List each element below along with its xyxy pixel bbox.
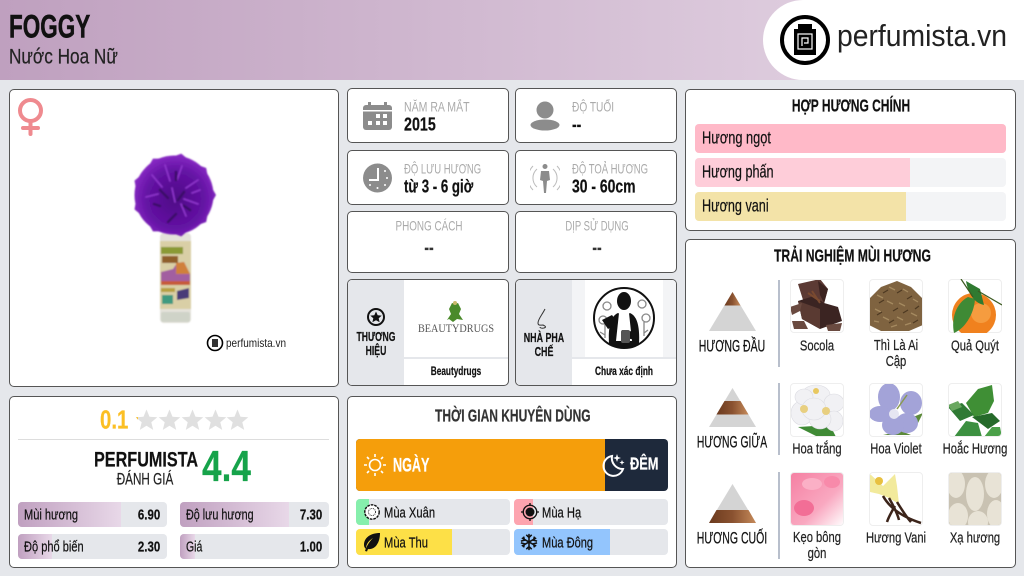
bar: Giá	[180, 534, 329, 559]
label: base notes: HƯƠNG CUỐI	[697, 529, 767, 548]
card: độ lưu hương: từ 3 - 6 giờ	[404, 176, 473, 197]
rating caption: ĐÁNH GIÁ	[117, 470, 173, 489]
icon: calendar	[363, 102, 392, 130]
panel: product image	[9, 89, 339, 387]
card: dịp sử dụng	[515, 211, 677, 273]
icon: female symbol	[18, 98, 286, 352]
heading: scent experience: TRẢI NGHIỆM MÙI HƯƠNG	[774, 247, 931, 266]
accord: Hương ngọt: Hương ngọt	[702, 129, 771, 148]
note: Socola	[790, 279, 844, 354]
accord: Hương vani: Hương vani	[702, 197, 769, 216]
note: Hoa Violet	[869, 383, 923, 457]
note: Socola: Socola	[800, 336, 834, 354]
icon: scent radius	[530, 164, 560, 193]
note: Hoa Violet: Hoa Violet	[870, 439, 922, 457]
bar: Mùi hương: Mùi hương	[24, 505, 78, 523]
brand logo: BEAUTYDRUGS	[418, 321, 494, 335]
bar: Độ phổ biến: Độ phổ biến	[24, 537, 84, 555]
card: phong cách: PHONG CÁCH	[396, 217, 462, 234]
card: thương hiệu: THƯƠNG HIỆU	[356, 329, 396, 358]
card: dịp sử dụng: DỊP SỬ DỤNG	[565, 217, 629, 234]
watermark: perfumista.vn	[226, 336, 286, 350]
day night bar: ĐÊM	[630, 455, 658, 474]
user score: 0.1	[100, 406, 128, 435]
season: Mùa Đông: Mùa Đông	[542, 533, 593, 551]
card: năm ra mắt	[347, 88, 509, 143]
perfumista score: 4.4	[202, 443, 251, 491]
card: năm ra mắt: 2015	[404, 114, 436, 135]
label: middle notes: HƯƠNG GIỮA	[697, 433, 767, 452]
bar: Độ phổ biến	[18, 534, 167, 559]
bar: Độ lưu hương: Độ lưu hương	[186, 505, 254, 523]
bar: Độ lưu hương	[180, 502, 329, 527]
header band	[0, 0, 1024, 80]
note: Xạ hương: Xạ hương	[950, 528, 1000, 546]
perfumer portrait	[593, 287, 655, 349]
season: Mùa Thu	[356, 529, 510, 555]
pyramid: base notes	[709, 484, 756, 523]
pyramid: top notes	[709, 292, 756, 331]
accord: Hương ngọt	[695, 124, 1006, 153]
note: Hoắc Hương	[943, 383, 1007, 457]
title: FOGGY	[9, 10, 90, 45]
icon: clock	[363, 164, 392, 192]
card: độ toả hương: ĐỘ TOẢ HƯƠNG	[572, 160, 648, 177]
card: năm ra mắt: NĂM RA MẮT	[404, 98, 470, 115]
card: nhà pha chế	[515, 279, 677, 386]
note: Kẹo bông gòn: Kẹo bông gòn	[793, 528, 841, 561]
bar: Độ lưu hương: 7.30	[300, 505, 322, 523]
card: độ lưu hương: ĐỘ LƯU HƯƠNG	[404, 160, 481, 177]
label: top notes: HƯƠNG ĐẦU	[699, 337, 765, 356]
card: độ toả hương	[515, 150, 677, 205]
note: Quả Quýt: Quả Quýt	[951, 336, 999, 354]
accord: Hương vani	[695, 192, 1006, 221]
note: Hoa trắng	[790, 383, 844, 457]
card: độ tuổi: ĐỘ TUỔI	[572, 98, 614, 115]
note: Hương Vani: Hương Vani	[866, 528, 926, 546]
bar: Mùi hương	[18, 502, 167, 527]
bar: Giá: 1.00	[300, 537, 322, 555]
note: Quả Quýt	[948, 279, 1002, 354]
logo: perfumista.vn	[763, 0, 1024, 80]
season: Mùa Đông	[514, 529, 668, 555]
card: độ lưu hương	[347, 150, 509, 205]
note: Thì Là Ai Cập: Thì Là Ai Cập	[874, 336, 918, 369]
brand logo	[418, 301, 494, 335]
stars	[136, 410, 248, 430]
card: độ toả hương: 30 - 60cm	[572, 176, 636, 197]
note: Hương Vani	[866, 472, 926, 546]
bar: Giá: Giá	[186, 537, 202, 555]
season: Mùa Xuân: Mùa Xuân	[384, 503, 435, 521]
note: Thì Là Ai Cập	[869, 279, 923, 370]
bar: Độ phổ biến: 2.30	[138, 537, 160, 555]
accord: Hương phấn: Hương phấn	[702, 163, 774, 182]
icon: sun	[364, 454, 386, 476]
card: phong cách: --	[424, 237, 434, 258]
card: độ tuổi: --	[572, 114, 581, 135]
heading: recommended time: THỜI GIAN KHUYÊN DÙNG	[435, 407, 591, 426]
watermark	[208, 336, 286, 350]
panel: main accords	[685, 89, 1016, 231]
season: Mùa Hạ: Mùa Hạ	[542, 503, 581, 521]
season: Mùa Xuân	[356, 499, 510, 525]
card: thương hiệu	[347, 279, 509, 386]
accord: Hương phấn	[695, 158, 1006, 187]
pyramid: middle notes	[709, 388, 756, 427]
card: phong cách	[347, 211, 509, 273]
panel: rating	[9, 396, 339, 568]
heading: main accords: HỢP HƯƠNG CHÍNH	[792, 97, 910, 116]
note: Hoa trắng: Hoa trắng	[792, 439, 842, 457]
panel: scent experience	[685, 239, 1016, 568]
note: Hoắc Hương: Hoắc Hương	[943, 439, 1007, 457]
icon: nose	[538, 308, 546, 329]
card: dịp sử dụng: --	[592, 237, 602, 258]
card: nhà pha chế: Chưa xác định	[595, 365, 653, 378]
day night bar	[356, 439, 668, 491]
season: Mùa Hạ	[514, 499, 668, 525]
card: nhà pha chế: NHÀ PHA CHẾ	[524, 330, 564, 359]
note: Kẹo bông gòn	[790, 472, 844, 562]
perfumista label: PERFUMISTA	[94, 448, 198, 472]
icon: person	[530, 102, 560, 130]
subtitle: Nước Hoa Nữ	[9, 45, 118, 69]
icon: moon	[602, 454, 624, 477]
season: Mùa Thu: Mùa Thu	[384, 533, 428, 551]
panel: recommended time	[347, 396, 677, 568]
note: Xạ hương	[948, 472, 1002, 546]
day night bar: NGÀY	[393, 454, 429, 476]
card: thương hiệu: Beautydrugs	[431, 365, 481, 378]
card: độ tuổi	[515, 88, 677, 143]
icon: star badge	[367, 308, 385, 326]
logo: perfumista.vn: perfumista.vn	[837, 18, 1007, 53]
bar: Mùi hương: 6.90	[138, 505, 160, 523]
